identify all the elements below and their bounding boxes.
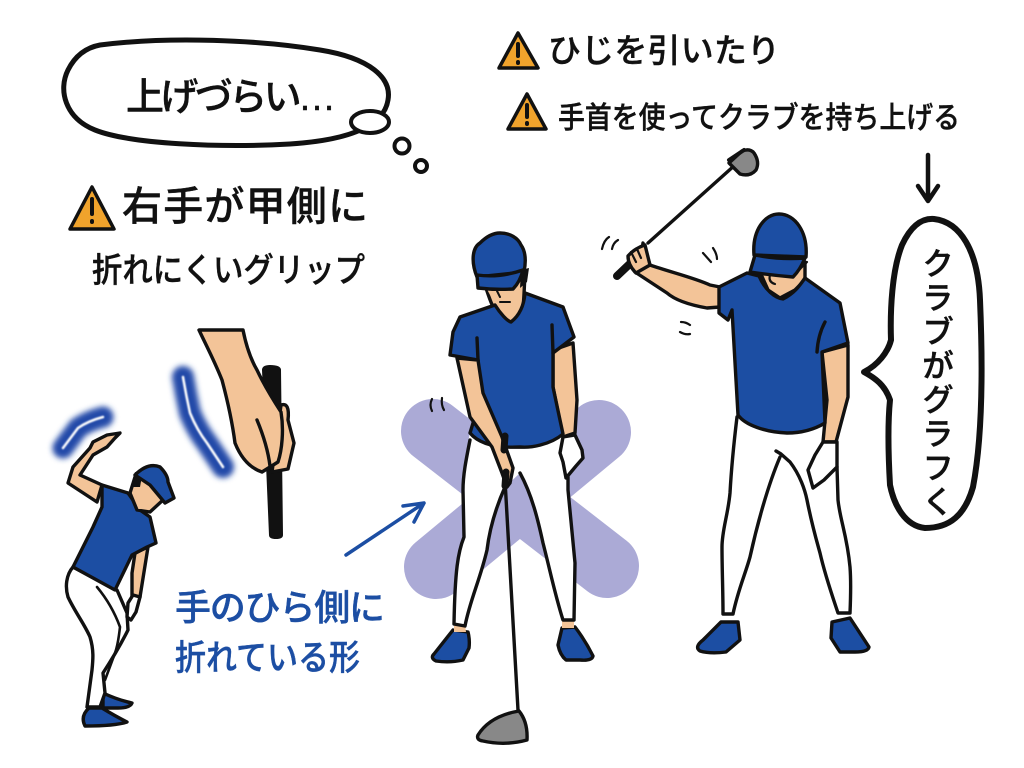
speech text: クラブがグラフく bbox=[918, 247, 954, 517]
sleeve seam bbox=[817, 322, 825, 352]
grip bbox=[262, 365, 283, 539]
raised arm bbox=[635, 243, 720, 308]
ear detail bbox=[770, 262, 807, 284]
grip bbox=[504, 436, 506, 486]
glove bbox=[808, 442, 837, 488]
left arm bbox=[457, 358, 513, 487]
cap dome bbox=[754, 214, 806, 257]
finger marks bbox=[631, 249, 641, 262]
hand bbox=[199, 330, 282, 472]
right arm bbox=[822, 345, 848, 442]
blue arrow bbox=[346, 503, 424, 555]
raised arm bbox=[68, 433, 120, 502]
warning: elbow bbox=[499, 32, 780, 69]
front arm bbox=[132, 547, 148, 597]
club shaft bbox=[648, 165, 735, 243]
caption line 2: 折れている形 bbox=[175, 639, 360, 678]
mouth bbox=[497, 291, 510, 302]
down arrow bbox=[918, 155, 938, 201]
speech bubble bbox=[864, 219, 982, 528]
hair bbox=[131, 472, 142, 487]
bubble text: 上げづらい… bbox=[126, 77, 336, 119]
glow stroke: hand bend bbox=[183, 377, 223, 467]
cap brim bbox=[477, 270, 523, 289]
warning text: grip line 2: 折れにくいグリップ bbox=[92, 252, 365, 290]
blue caption bbox=[175, 587, 385, 678]
thought bubble bbox=[64, 40, 427, 172]
cap bbox=[135, 466, 174, 503]
golfer: center address bbox=[430, 233, 593, 743]
grip close-up bbox=[199, 330, 294, 539]
fingers behind bbox=[272, 405, 294, 472]
right arm bbox=[553, 343, 577, 437]
club grip bbox=[617, 257, 637, 276]
left shoe bbox=[698, 622, 740, 653]
cap brim bbox=[750, 255, 805, 277]
warning: wrist bbox=[508, 94, 960, 135]
face bbox=[130, 477, 163, 512]
shirt bbox=[450, 293, 574, 447]
driver head bbox=[478, 711, 527, 743]
right shoe bbox=[558, 627, 593, 660]
motion lines bbox=[430, 398, 444, 411]
shaft bbox=[505, 480, 518, 710]
pants bbox=[454, 430, 575, 626]
warning: grip bbox=[70, 185, 368, 290]
golfer: right backswing bbox=[602, 150, 869, 653]
pants fold bbox=[97, 587, 120, 680]
front shoe bbox=[83, 708, 127, 726]
right shoe bbox=[831, 618, 869, 652]
cap dome bbox=[473, 233, 525, 277]
face fill bbox=[487, 288, 521, 310]
pants bbox=[66, 567, 128, 707]
glove bbox=[127, 595, 140, 620]
glow stroke: wrist bend bbox=[63, 417, 103, 448]
ankles bbox=[454, 618, 574, 632]
hand bbox=[628, 245, 650, 273]
warning text: wrist: 手首を使ってクラブを持ち上げる bbox=[558, 102, 960, 135]
glove bbox=[560, 435, 583, 478]
club head bbox=[729, 150, 758, 175]
shirt bbox=[73, 485, 156, 590]
X mark bbox=[433, 431, 607, 567]
left shoe bbox=[432, 630, 469, 662]
right sleeve seam bbox=[552, 325, 553, 353]
golfer: bending demonstration bbox=[66, 433, 174, 726]
back shoe bbox=[103, 693, 132, 708]
face bbox=[760, 262, 805, 298]
left sleeve seam bbox=[477, 338, 478, 360]
warning text: elbow: ひじを引いたり bbox=[548, 32, 780, 69]
motion lines bbox=[602, 237, 717, 334]
neck and face bbox=[485, 270, 525, 325]
shirt bbox=[719, 273, 848, 433]
right ear hair bbox=[520, 268, 529, 288]
caption line 1: 手のひら側に bbox=[175, 587, 385, 628]
warning text: grip line 1: 右手が甲側に bbox=[122, 185, 368, 229]
pants bbox=[722, 410, 850, 614]
